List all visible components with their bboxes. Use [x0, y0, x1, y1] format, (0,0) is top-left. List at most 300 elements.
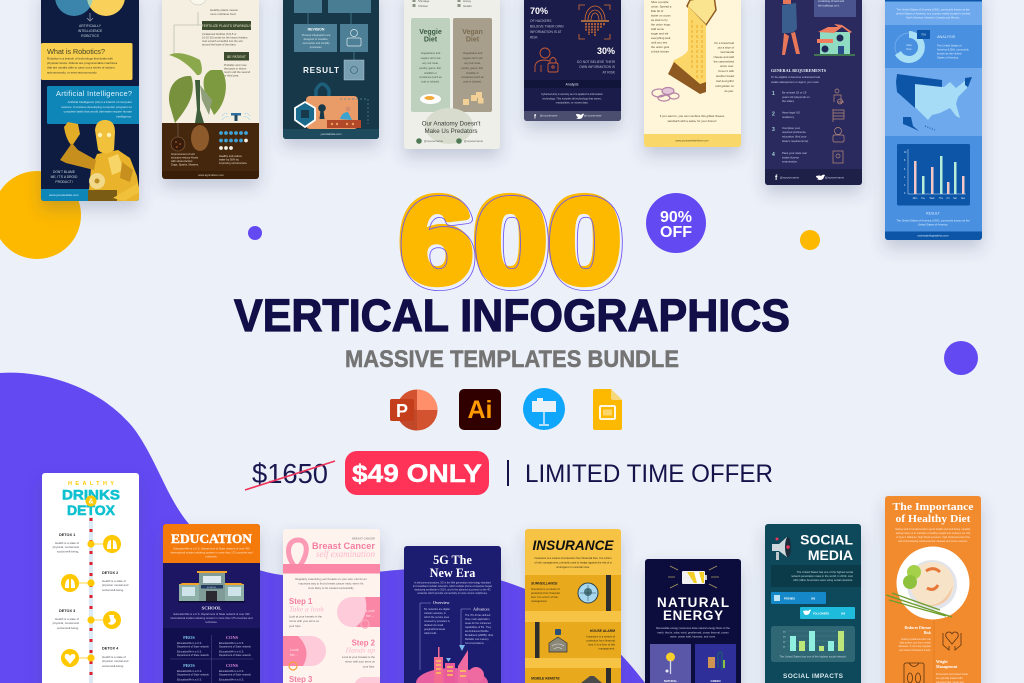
onion rings: [652, 88, 679, 101]
intro text: Regularly examining your breasts on your own, can be an: [295, 577, 367, 581]
analysis text: America (USA), commonly: [937, 48, 969, 52]
icon: PowerPoint: P: [396, 401, 408, 421]
orange header: [163, 524, 260, 563]
requirements list: 3: [772, 127, 775, 133]
natural energy intro: Renewable energy resources draw natural energy flows of the: [656, 626, 730, 630]
intro band: United States or America, is a country mostly located in central: [896, 12, 971, 16]
social handles: @myusername: [464, 139, 483, 143]
panel: veggie diet: shellfish or: [424, 71, 437, 75]
social footer: [765, 169, 862, 185]
recipe note: If you want to, you can combine this grilled cheese: [660, 114, 725, 118]
drinks heading: [62, 481, 120, 518]
healthy diet heading: [892, 502, 974, 525]
reduces disease risk: Risk: [924, 631, 932, 635]
requirement icons: [833, 89, 844, 163]
timeline connectors: [70, 544, 112, 658]
natural energy heading: [657, 595, 729, 623]
top boxes: [294, 0, 371, 13]
panel: vegan diet: crab or lobster).: [463, 80, 482, 84]
chart panel: Sat: [953, 197, 957, 200]
requirements heading: GENERAL REQUIREMENTS: [771, 68, 827, 73]
patient text: that grow or bloom: [224, 66, 247, 70]
natural energy intro: [656, 626, 730, 638]
info box: the buildings on it.: [818, 4, 840, 8]
intro text: more likely to be treated successfully.: [308, 586, 354, 590]
panel: breast cancer infographic: [278, 529, 385, 683]
step 1: Look at your breasts in the: [289, 614, 322, 618]
US map: [896, 74, 972, 131]
intro band: North America, between Canada and Mexico.: [906, 16, 960, 20]
connector lines: [420, 603, 471, 670]
stat 30 percent: DO NOT BELIEVE THEIR: [577, 60, 616, 64]
footer url: www.yourwebsite.com: [49, 193, 79, 197]
recipe text right: [713, 41, 734, 93]
5G intro: for broadband cellular networks, which cellular phone companies began: [413, 585, 493, 588]
surveillance row: Insurance is a means of: [531, 587, 560, 591]
school building: [178, 571, 245, 602]
pros and cons table: EducationWe is a U.S.: [177, 642, 202, 645]
requirements intro: estate salesperson or agent, you must:: [771, 80, 819, 84]
caption: more nutritious food: [210, 12, 236, 16]
connector lines: [174, 12, 202, 57]
panel: vegan diet: any red meat,: [464, 61, 481, 65]
footer url: usamapinfographics.com: [917, 234, 949, 238]
healthy diet intro: [896, 527, 971, 543]
stat 70 percent: OF HACKERS: [530, 19, 552, 23]
surveillance row: management.: [531, 599, 548, 603]
education intro: EducationWe is a U.S. Department of State network of over 430: [174, 546, 250, 550]
result text: [896, 212, 970, 226]
diet title: Our Anatomy Doesn't: [422, 120, 481, 128]
recipe text right: On a bread loaf: [714, 41, 734, 45]
panel: social media infographic: [765, 524, 861, 683]
pros and cons table: PROS: [183, 635, 195, 640]
panel: veggie diet: [411, 18, 450, 112]
surveillance row: protection from financial: [531, 591, 560, 595]
requirements list: [772, 90, 810, 164]
analysis text: ANALYSIS: [937, 35, 956, 39]
price button: $49 ONLY: [352, 460, 482, 488]
stat 30 percent: [577, 46, 616, 74]
detox 2: [102, 571, 129, 592]
recipe text left: Add some: [651, 27, 664, 31]
result text: RESULT: [926, 212, 941, 216]
overview: 5G networks are digital: [424, 608, 450, 611]
footer: [162, 171, 259, 179]
donut chart: [895, 31, 925, 63]
panel: veggie diet: Vegetarians and: [421, 51, 441, 55]
overview: geographical areas: [424, 628, 446, 631]
5G heading: [430, 553, 475, 580]
panel: real estate infographic: [765, 0, 862, 185]
footer band: [41, 189, 139, 201]
requirements list: education (find your: [782, 134, 807, 138]
stat 70 percent: [530, 6, 564, 40]
pros and cons table: Department of State network: [177, 646, 210, 648]
social footer: @myusername: [584, 114, 602, 118]
education intro: territories.: [206, 554, 218, 558]
robot speech text: [50, 170, 78, 183]
detox 1: social well-being.: [57, 550, 79, 554]
revision box: Process infographics are: [302, 33, 331, 37]
reduces disease risk: Reduces Disease: [905, 626, 931, 630]
fertilize text: around the base of the plant.: [202, 42, 236, 46]
patient text: Probably won't see: [224, 63, 247, 67]
panel: plant infographic: [162, 0, 259, 179]
stat 30 percent: AT RISK: [602, 70, 616, 74]
analysis text: known as the United: [937, 52, 962, 56]
stat 70 percent: INFORMATION IS AT: [530, 30, 562, 34]
patient text: [224, 64, 250, 77]
footer url: yourwebsite.com: [320, 132, 342, 136]
footer: [283, 129, 379, 139]
house alarm row: Insurance is a means of: [586, 634, 615, 638]
panel: drinks and detox infographic: [42, 473, 139, 683]
robot speech text: PRODUCT!: [55, 180, 73, 184]
facebook stat: FRIENDS: [784, 598, 795, 600]
requirements list: Have legal US: [782, 110, 800, 114]
recipe text left: a thick texture.: [651, 50, 670, 54]
green panel: GREEN: [711, 679, 720, 683]
panel: education infographic: [163, 524, 260, 683]
step 1: mirror with your arms on: [289, 619, 320, 623]
stat 70 percent: RISK: [530, 36, 538, 40]
result text: The United States of America (USA), commonly known as the: [896, 218, 970, 222]
requirements list: 4: [772, 152, 775, 158]
social intro: [771, 565, 861, 587]
fertilize text: 10-10-10) works for the heavy feeders.: [202, 36, 248, 40]
panel: robotics infographic: [41, 0, 141, 201]
advances: Reliable Low Latency: [465, 638, 490, 641]
weight management: Processed and refined foods: [936, 673, 969, 676]
blue panel: artificial intelligence: [47, 86, 141, 124]
panel: vegan diet: [453, 18, 492, 112]
recipe text left: until you see: [651, 40, 668, 44]
social media heading: MEDIA: [808, 547, 853, 563]
patient text: or third year.: [224, 74, 239, 78]
bar chart panel: [771, 626, 855, 662]
detox 2: DETOX 2: [102, 571, 118, 575]
stat 30 percent: 30%: [597, 46, 615, 56]
blue panel: artificial intelligence: intelligence.: [116, 114, 132, 118]
woman illustration: [782, 0, 800, 55]
analysis text: The United States of: [937, 44, 962, 48]
person with laptop: [327, 106, 361, 128]
detox 4: physical, mental and: [102, 659, 129, 663]
blue panel: artificial intelligence: Artificial Intelligence (AI) is a branch of computer: [68, 100, 132, 104]
school label: SCHOOL: [202, 606, 221, 610]
detox icons: [61, 535, 121, 667]
yellow panel: what is robotics: Robotics is a branch of technology that deals with: [47, 56, 113, 60]
reduces disease risk: your blood cholesterol levels.: [899, 649, 931, 652]
panel: vegan diet: Diet: [466, 36, 480, 44]
revision box: [294, 24, 337, 52]
detox 4: Health is a state of: [102, 655, 126, 659]
discount badge: [646, 193, 706, 253]
education heading: EDUCATION: [171, 532, 252, 546]
breast cancer heading: BREAST CANCER: [352, 536, 375, 540]
school text: international student advising centers in more than 175 countries and: [170, 616, 253, 620]
plant top circle: [189, 0, 207, 5]
panel: veggie diet: poultry, game, fish,: [419, 66, 442, 70]
twitter stat: [800, 607, 855, 619]
natural energy heading: ENERGY: [663, 608, 723, 623]
timeline nodes: [87, 540, 95, 662]
yellow panel: what is robotics: What is Robotics?: [47, 47, 105, 56]
natural energy intro: wave, ocean tidal, biomass, and more.: [670, 634, 716, 638]
5G heading: New Era: [430, 566, 475, 580]
panel: usa infographic: [885, 0, 982, 240]
soil text left: with stress factors: [171, 159, 193, 163]
social intro: network penetration rates in the world. In 2019, over: [791, 574, 853, 578]
chart panel: Mon: [913, 198, 918, 200]
intro text: [295, 577, 367, 590]
venn caption: INTELLIGENCE: [78, 29, 103, 33]
caption: Healthy plants means: [210, 8, 238, 12]
detox 3: DETOX 3: [59, 609, 75, 613]
pros and cons table: EducationWe is a U.S.: [177, 670, 202, 673]
donut label: 70%: [921, 34, 927, 36]
chart panel: Sun: [961, 198, 966, 200]
pink ribbon: [283, 540, 380, 574]
bar chart panel: 04: [783, 632, 786, 634]
detox 1: Health is a state of: [55, 541, 79, 545]
natural panel: NATURAL: [664, 679, 677, 683]
laptop person box: [340, 24, 368, 52]
mobile remote row: MOBILE REMOTE: [531, 676, 560, 680]
limited time offer: LIMITED TIME OFFER: [525, 460, 773, 488]
checklists: Gelatin: [463, 4, 472, 8]
plate illustration: [886, 546, 970, 620]
detox 3: physical, mental and: [53, 621, 79, 625]
pros and cons table: EducationWe is a U.S.: [177, 650, 202, 654]
pros and cons table: CONS: [226, 635, 239, 640]
step 2: Look: [290, 647, 299, 652]
soil text right: Healthy soil reduce: [219, 154, 242, 158]
insurance heading: INSURANCE: [532, 537, 614, 553]
panel: vegan diet: Vegetarians and: [463, 51, 483, 55]
panel: grilled cheese infographic: [644, 0, 741, 147]
pros and cons table: [163, 628, 260, 683]
robot speech text: ME, IT'S A DROID: [51, 175, 78, 179]
social footer: f: [534, 114, 537, 120]
panel: vegan diet: crustacea (such as: [461, 75, 484, 79]
facebook stat: 500: [811, 598, 816, 600]
weight management: [936, 660, 969, 683]
breast cancer heading: self examination: [316, 549, 376, 559]
number 600 heading: [372, 172, 662, 312]
chart panel: Wed: [930, 198, 935, 200]
panel: vegan diet: shellfish or: [466, 71, 479, 75]
breast cancer heading: Breast Cancer: [312, 541, 375, 551]
social intro: 246 million Americans were using social networks.: [793, 578, 853, 582]
requirements intro: [771, 75, 820, 84]
map band: [885, 68, 982, 136]
chart panel: 10: [904, 152, 907, 154]
detox 3: social well-being.: [57, 626, 79, 630]
shield hexagon: [295, 102, 315, 127]
healthy diet intro: risk of developing cardiovascular disease and some cancers.: [898, 539, 968, 543]
revision box: summarize and simplify: [302, 41, 330, 45]
padlock person icon: [535, 48, 558, 72]
decorative large purple dot: [944, 341, 978, 375]
natural energy heading: NATURAL: [657, 595, 729, 610]
stat 70 percent: BELIEVE THEIR OWN: [530, 24, 564, 28]
detox 1: [53, 533, 79, 554]
advances: Broadband (eMBB), Ultra: [465, 634, 494, 637]
bar chart panel: 02: [783, 642, 786, 644]
recipe text left: sugar and stir: [651, 32, 669, 36]
breast cancer heading: [312, 536, 376, 559]
chart panel: 8: [904, 160, 906, 162]
requirements list: Complete your: [782, 126, 800, 130]
intro text: important way to find a breast cancer early, when it's: [299, 582, 364, 586]
bar chart panel: 01: [783, 646, 786, 648]
recipe text right: put a slice of: [718, 46, 734, 50]
panel: veggie diet: crustacea (such as: [419, 75, 442, 79]
chart panel: 6: [904, 169, 906, 171]
requirements list: state's requirements).: [782, 139, 809, 143]
recipe text right: do pan.: [724, 89, 734, 93]
panel: veggie diet: Veggie: [419, 29, 442, 36]
revision box: designed to visualize,: [304, 37, 329, 41]
advances: Communications.: [465, 642, 485, 645]
panel: veggie diet: Diet: [424, 36, 438, 44]
education intro: [170, 546, 253, 558]
recipe note: sandwich with a salsa, for your dinner!: [667, 119, 717, 123]
icon: Keynote: [523, 388, 565, 430]
requirements list: required prelicense: [782, 130, 806, 134]
blue panel: artificial intelligence: complete tasks that would otherwise require human: [64, 110, 132, 114]
column divider: [933, 620, 935, 683]
blob behind title: [425, 108, 473, 144]
social intro: The United States has one of the highest social: [797, 570, 853, 574]
donut label: [917, 30, 930, 39]
detox 4: social well-being.: [102, 664, 124, 668]
main title: VERTICAL INFOGRAPHICS: [234, 290, 790, 341]
pros and cons table: Department of State network: [177, 674, 210, 676]
recipe text left: little bit of: [651, 9, 663, 13]
detox 4: DETOX 4: [102, 646, 119, 650]
step 1: Look: [366, 608, 375, 613]
requirements list: the state).: [782, 99, 795, 103]
analysis text: technology. This includes all technology that stores,: [542, 96, 602, 100]
school text: [170, 612, 253, 624]
insurance intro: Insurance is a means of protection from financial loss. It is a form: [534, 556, 612, 560]
decorative orange dot: [800, 230, 820, 250]
diet title: [422, 120, 481, 135]
icon: Google Slides: [593, 389, 622, 430]
analysis band: Analysis: [565, 82, 579, 86]
megaphone icon: [772, 537, 791, 560]
old price: $1650: [252, 458, 328, 489]
pros and cons table: Department of State network: [177, 654, 210, 657]
drinks heading: HEALTHY: [68, 481, 114, 487]
reduces disease risk: help protect you from certain: [899, 642, 932, 644]
social footer: [524, 111, 621, 121]
requirements list: estate license: [782, 156, 800, 160]
overview: [424, 600, 450, 635]
requirements list: years old (depends on: [782, 95, 810, 99]
drinks heading: DRINKS: [62, 486, 120, 502]
weight management: Management: [936, 665, 958, 669]
separator: [507, 460, 509, 486]
analysis text: [937, 35, 969, 60]
blue panel: artificial intelligence: science. It involves developing computer programs to: [61, 105, 132, 109]
advances: [465, 606, 494, 645]
diet title: Make Us Predators: [425, 128, 477, 135]
pros and cons table: EducationWe is a U.S.: [219, 650, 244, 654]
step 2: Step 2: [352, 638, 376, 648]
house alarm row: [525, 622, 621, 658]
detox 3: [53, 609, 79, 630]
step 1: [289, 597, 385, 628]
straw timeline: [89, 517, 93, 683]
result heading: RESULT: [303, 66, 339, 75]
5G intro: In telecommunications, 5G is the fifth generation technology standard: [414, 582, 491, 584]
school building: SCHOOL: [207, 587, 217, 589]
reduces disease risk: diseases. It can help regulate: [898, 645, 932, 648]
chart panel: Tue: [921, 198, 926, 200]
info box: consisting of land and: [818, 0, 845, 3]
mobile remote row: [525, 668, 621, 683]
natural energy intro: earth, that is, solar, wind, geothermal, ocean thermal, ocean: [657, 630, 729, 634]
sprinkler: [222, 113, 250, 121]
step 2: [278, 636, 376, 670]
water drops rating: [219, 131, 248, 150]
city illustration: [416, 645, 488, 683]
detox 4: [102, 646, 129, 668]
analysis text: [541, 92, 603, 104]
chart panel: 2: [904, 185, 906, 187]
bar chart panel: The United States has one of the highest social network.: [779, 654, 847, 658]
step 3: [289, 675, 385, 683]
overview: which the service area: [424, 616, 449, 619]
soil text left: [171, 153, 198, 166]
soil text left: Dogs, Sparks, Mowers.: [171, 162, 199, 166]
recipe note: [660, 114, 725, 123]
recipe text right: another bread: [716, 74, 734, 78]
label: be patient: [224, 52, 249, 60]
insurance intro: [534, 556, 612, 569]
robot speech text: DON'T BLAME: [53, 170, 76, 174]
panel: natural energy infographic: [645, 559, 741, 683]
social impacts heading: SOCIAL IMPACTS: [783, 673, 844, 680]
house illustration: [814, 24, 855, 55]
recipe text right: mozzarella: [720, 50, 734, 54]
reduces disease risk: Eating a balanced diet can: [902, 638, 932, 641]
house alarm row: loss. It is a form of risk: [588, 642, 616, 646]
detox 2: Health is a state of: [102, 579, 126, 583]
label: be patient: BE PATIENT: [227, 55, 246, 59]
soil magnifier: [171, 123, 185, 151]
dashed frame: [340, 99, 368, 124]
footer url: www.agriculture.com: [198, 173, 225, 177]
donut chart: Here: [906, 48, 912, 51]
weight management: are typically loaded with: [936, 677, 963, 680]
step 2: for...: [290, 652, 298, 657]
yellow panel: what is robotics: [41, 43, 132, 80]
house alarm row: management.: [599, 646, 615, 650]
label: fertilize: FERTILIZE PLANTS SPARINGLY: [202, 24, 252, 28]
intro band: The United States of America (USA), commonly known as the: [896, 8, 970, 12]
education intro: international student advising centers in more than 175 countries and: [170, 550, 253, 554]
requirements list: Be at least 18 or 19: [782, 90, 807, 94]
recipe text left: the onion gets: [651, 45, 670, 49]
analysis text: Cybersecurity is security as it is applied to information: [541, 92, 603, 96]
step 2: Look at your breasts in the: [342, 655, 375, 659]
revision box: processes.: [310, 45, 323, 49]
